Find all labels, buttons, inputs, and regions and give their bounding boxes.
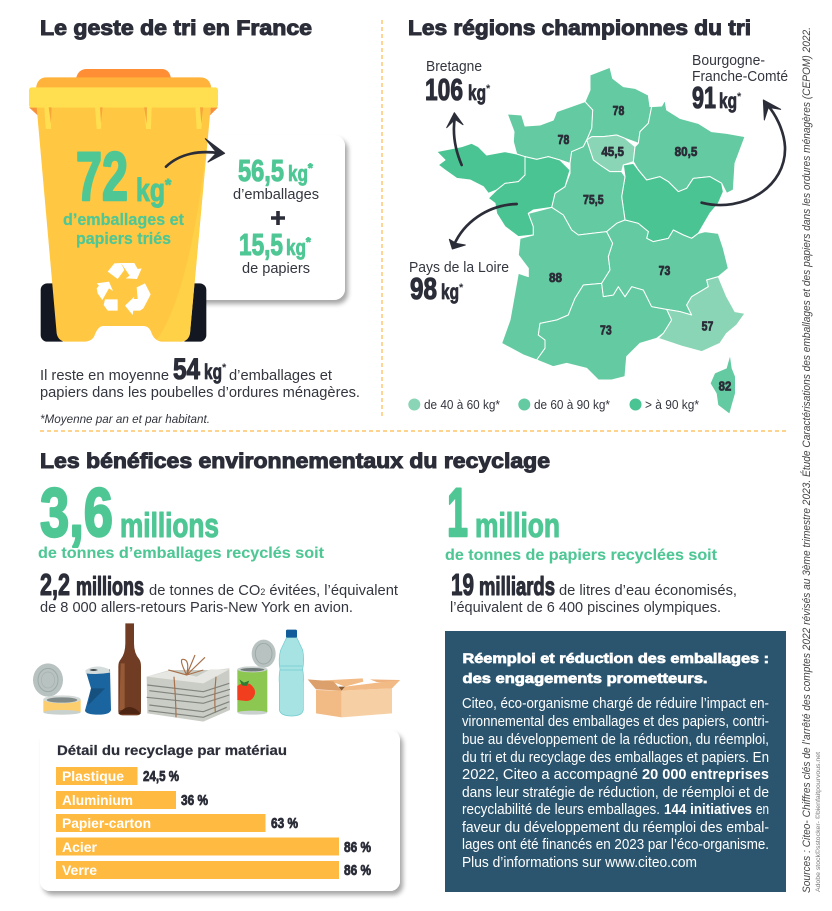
text: emballages et papiers triés: papiers triés (76, 229, 171, 248)
stat: 72 kg: kg (136, 172, 165, 208)
panel body text: Citeo, éco-organisme chargé de réduire l’impact en- (462, 696, 769, 712)
callout: Pays de la Loire: * (459, 282, 464, 294)
panel heading: Réemploi et réduction des emballages : (462, 650, 769, 666)
bar: plastique: Plastique (62, 768, 124, 784)
callout: Pays de la Loire: Pays de la Loire (409, 259, 509, 276)
stat: 1 million (447, 474, 560, 551)
panel body text: lages ont été financés en 2023 par l’éco-organisme. (462, 837, 769, 853)
bar: papier-carton: 63 % (271, 815, 298, 832)
panel body text: en (756, 802, 769, 818)
panel heading (462, 650, 769, 686)
stat: 3,6 millions (40, 474, 219, 551)
photo credits: Adobe stock©sstocker- ©bienfaitpourvous.net (815, 752, 822, 892)
arrow: Bretagne (447, 113, 463, 165)
callout: Bourgogne-Franche-Comté: * (737, 91, 742, 103)
bar: verre: 86 % (344, 862, 371, 879)
map legend: de 40 à 60 kg* (424, 398, 500, 412)
panel body text: dans leur stratégie de réduction, de réemploi et de (462, 785, 769, 801)
arrow: bin to card (166, 139, 225, 167)
panel body text: 20 000 entreprises (642, 767, 769, 783)
bar: papier-carton (56, 814, 298, 832)
region: Provence-Alpes-Côte d'Azur (658, 277, 745, 352)
panel: breakdown card (190, 135, 345, 300)
icon: tomato can (237, 640, 276, 715)
panel body text (462, 696, 769, 871)
text: CO2 avoided: 2,2 (40, 567, 70, 602)
callout: Bourgogne-Franche-Comté: Franche-Comté (692, 68, 788, 85)
label: papiers: de papiers (242, 260, 310, 277)
panel body text: 2022, Citeo a accompagné (462, 767, 638, 783)
bar: aluminium: Aluminium (62, 792, 133, 808)
callout: Bourgogne-Franche-Comté: Bourgogne- (692, 52, 765, 69)
region: Occitanie (537, 283, 672, 380)
map values: 78 (613, 103, 624, 118)
map values: 57 (702, 319, 713, 334)
region: Bourgogne-Franche-Comté (622, 163, 723, 242)
panel: réemploi et réduction (445, 631, 786, 892)
panel heading: des engagements prometteurs. (462, 670, 708, 686)
callout: Bretagne: Bretagne (426, 58, 482, 75)
title: régions championnes: Les régions championnes du tri (408, 17, 751, 40)
text: emballages et papiers triés: d’emballages et (63, 210, 184, 229)
callout: Pays de la Loire (409, 259, 509, 306)
stat: 3,6 millions: millions (120, 507, 219, 545)
icon: newspapers (147, 655, 230, 722)
map of France (437, 67, 745, 413)
stat: 72 kg: 72 (76, 138, 128, 215)
stat: 56,5 kg: * (308, 161, 313, 175)
callout: Bourgogne-Franche-Comté (692, 52, 788, 115)
text: emballages et papiers triés (63, 210, 184, 248)
stat: 56,5 kg: kg (288, 161, 308, 186)
panel: material recycling detail (40, 730, 400, 891)
text: CO2 avoided: millions (76, 571, 144, 601)
region: Auvergne-Rhône-Alpes (602, 220, 728, 315)
icon: cardboard box (308, 678, 400, 717)
icon: crushed can (85, 666, 111, 715)
stat: 1 million: million (475, 507, 560, 545)
region: Pays de la Loire (488, 157, 570, 237)
bar: verre: Verre (62, 862, 97, 878)
callout: Pays de la Loire: 98 (410, 271, 437, 306)
region: Centre-Val de Loire (552, 140, 625, 235)
map values: 73 (659, 263, 670, 278)
footnote: *Moyenne par an et par habitant. (40, 412, 210, 426)
text: CO2 avoided: de tonnes de CO2 évitées, l’équivalent (149, 582, 399, 599)
callout: Bretagne: 106 (425, 72, 463, 107)
text: water saved (450, 567, 737, 616)
plus sign (271, 211, 285, 225)
panel body text: 144 initiatives (664, 802, 752, 818)
bar: acier (56, 838, 371, 856)
callout: Bourgogne-Franche-Comté: 91 (692, 80, 716, 115)
stat: 3,6 millions: 3,6 (40, 474, 113, 551)
text: CO2 avoided (40, 567, 399, 616)
map legend (408, 398, 699, 412)
text: remaining waste (40, 353, 360, 401)
map values: 82 (719, 379, 731, 394)
panel body text: bue au développement de la réduction, du réemploi, (462, 732, 769, 748)
title: le geste de tri: Le geste de tri en France (40, 17, 312, 40)
stat: 15,5 kg: kg (286, 235, 306, 260)
callout: Bretagne: kg (468, 82, 486, 105)
bar: plastique: 24,5 % (143, 768, 179, 785)
text: remaining waste: 54 (173, 353, 200, 386)
bar: verre (56, 861, 371, 879)
region: Île-de-France (587, 135, 635, 172)
text: water saved: de litres d’eau économisés, (559, 582, 737, 599)
callout: Bourgogne-Franche-Comté: kg (719, 90, 737, 113)
stat: 72 kg: * (165, 177, 172, 194)
bar: aluminium: 36 % (181, 792, 208, 809)
callout: Bretagne: * (486, 83, 491, 95)
map values: 73 (600, 323, 612, 338)
panel body text: vironnemental des emballages et des papiers, contri- (462, 714, 769, 730)
stat: 15,5 kg: * (306, 235, 311, 249)
icon: plastic bottle (279, 630, 304, 716)
bar: papier-carton: Papier-carton (62, 815, 151, 831)
bar: acier: 86 % (344, 839, 371, 856)
region: Bretagne (437, 143, 525, 193)
bar: aluminium (56, 791, 208, 809)
callout: Pays de la Loire: kg (441, 281, 459, 304)
map legend: de 60 à 90 kg* (534, 398, 610, 412)
subtitle: emballages recyclés: de tonnes d’emballages recyclés soit (38, 545, 325, 562)
icon: yellow recycling bin (29, 69, 218, 342)
arrow: Pays de la Loire (449, 204, 517, 249)
illustration: recyclable materials (33, 623, 400, 722)
panel body text: recyclabilité de leurs emballages. (462, 802, 660, 818)
stat: 1 million: 1 (447, 474, 468, 551)
panel body text: du tri et du recyclage des emballages et papiers. En (462, 750, 769, 766)
chart title: Détail du recyclage par matériau (57, 743, 287, 758)
map values: 75,5 (583, 192, 604, 207)
text: remaining waste: Il reste en moyenne (40, 367, 169, 384)
map values: 45,5 (601, 144, 624, 159)
icon: recycling symbol (97, 263, 151, 315)
bar: acier: Acier (62, 839, 98, 855)
region: Grand Est (633, 100, 745, 193)
subtitle: papiers recyclés: de tonnes de papiers recyclées soit (445, 547, 718, 564)
map values: 78 (558, 132, 569, 147)
sources note: Sources : Citeo- Chiffres clés de l’arrêté des comptes 2022 révisés au 3ème trimestre 2023. Étude Caractérisations des emballages et des papiers dans les ordures ménagères (CEPOM) 2022. (800, 27, 813, 893)
map values: 88 (549, 270, 562, 285)
text: water saved: milliards (479, 571, 555, 601)
icon: open tin (33, 663, 81, 715)
stat: 15,5 kg: 15,5 (239, 227, 283, 262)
region: Corse (711, 357, 735, 413)
text: remaining waste: papiers dans les poubelles d’ordures ménagères. (40, 384, 360, 401)
text: water saved: l’équivalent de 6 400 piscines olympiques. (450, 599, 721, 616)
region: Nouvelle-Aquitaine (502, 207, 613, 360)
label: emballages: d’emballages (233, 186, 319, 203)
icon: glass bottle (118, 623, 141, 715)
text: remaining waste: kg (204, 361, 222, 384)
map values (549, 103, 731, 394)
stat: 56,5 kg: 56,5 (238, 153, 284, 188)
arrow: Bourgogne-Franche-Comté (702, 100, 785, 205)
callout: Bretagne (425, 58, 491, 107)
text: remaining waste: d’emballages et (229, 367, 333, 384)
text: CO2 avoided: de 8 000 allers-retours Paris-New York en avion. (40, 599, 353, 616)
region: Hauts-de-France (585, 67, 652, 143)
panel body text: faveur du développement du réemploi des embal- (462, 820, 769, 836)
bar: plastique (56, 767, 179, 785)
region: Normandie (507, 102, 593, 163)
map values: 80,5 (675, 144, 697, 159)
title: bénéfices: Les bénéfices environnementaux du recyclage (40, 450, 550, 473)
text: remaining waste: * (222, 362, 227, 374)
text: water saved: 19 (451, 567, 474, 602)
map legend: > à 90 kg* (645, 398, 699, 412)
panel body text: Plus d’informations sur www.citeo.com (462, 855, 697, 871)
